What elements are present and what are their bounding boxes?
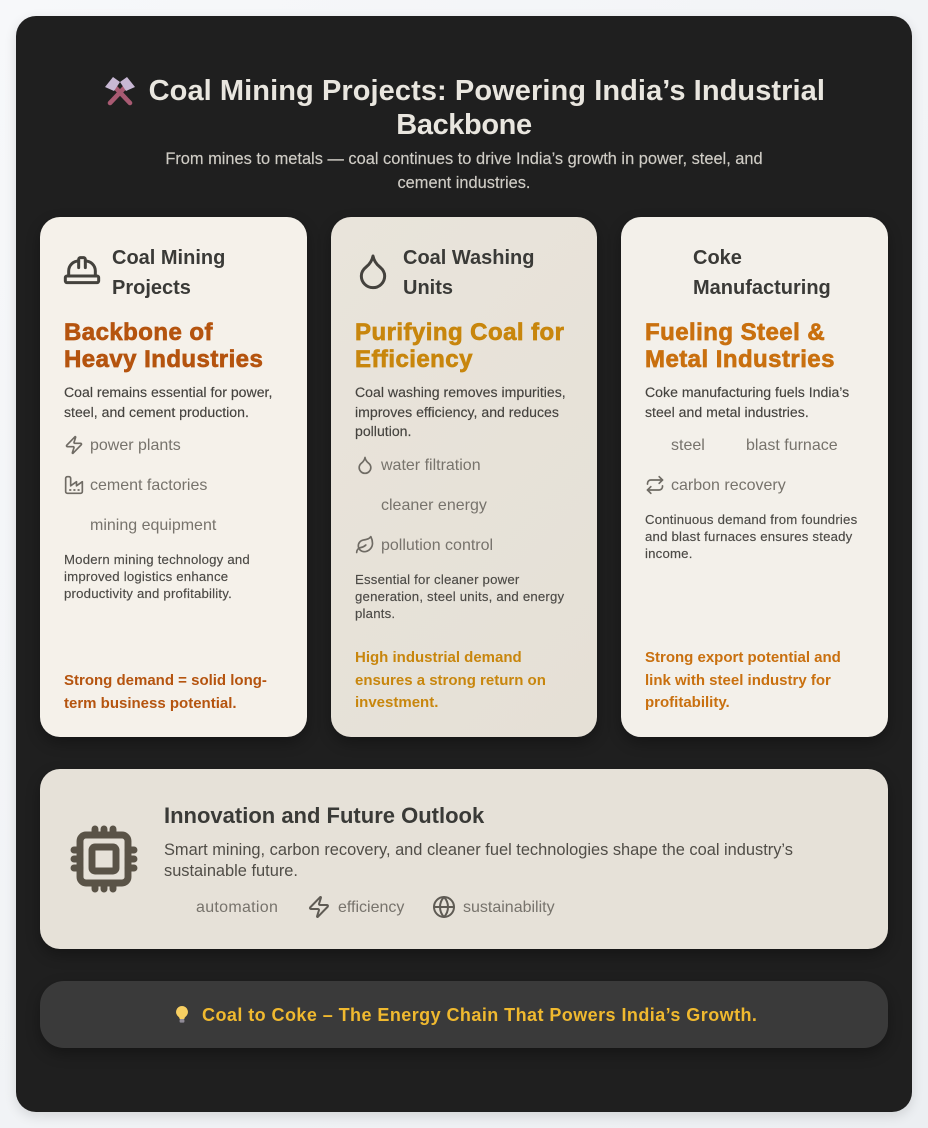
card call to action bbox=[645, 649, 841, 711]
card subheading: Efficiency bbox=[355, 346, 473, 373]
icon: water droplet bbox=[360, 254, 386, 290]
closing message: Coal to Coke – The Energy Chain That Powers India’s Growth. bbox=[202, 1005, 757, 1025]
title: Coal Mining Projects: Powering India’s Industrial bbox=[149, 75, 825, 107]
card call to action: High industrial demand bbox=[355, 649, 522, 666]
tag: carbon recovery: carbon recovery bbox=[671, 477, 786, 494]
tag: steel: steel bbox=[671, 437, 705, 454]
panel: coke manufacturing bbox=[621, 217, 888, 737]
card call to action: Strong demand = solid long- bbox=[64, 672, 267, 689]
card description: pollution. bbox=[355, 423, 411, 439]
card note: income. bbox=[645, 546, 693, 561]
icon: repeat arrows bbox=[646, 476, 664, 494]
card heading: Manufacturing bbox=[693, 277, 831, 299]
tag: power plants: power plants bbox=[90, 437, 181, 454]
title: Backbone bbox=[396, 109, 532, 141]
card call to action: term business potential. bbox=[64, 694, 237, 712]
card subheading bbox=[355, 319, 564, 373]
tag: efficiency bbox=[308, 896, 404, 918]
icon: globe bbox=[433, 896, 455, 918]
card note: Continuous demand from foundries bbox=[645, 512, 857, 527]
card description: steel and metal industries. bbox=[645, 404, 809, 420]
card note bbox=[64, 552, 250, 601]
card heading: Coal Mining bbox=[112, 247, 225, 269]
card note: Modern mining technology and bbox=[64, 552, 250, 567]
icon: crossed hammers emoji bbox=[105, 77, 135, 106]
card heading bbox=[403, 247, 534, 299]
panel: coal mining projects bbox=[40, 217, 307, 737]
tag: cement factories: cement factories bbox=[90, 477, 207, 494]
card call to action: Strong export potential and bbox=[645, 649, 841, 666]
card heading bbox=[693, 247, 831, 299]
card description: improves efficiency, and reduces bbox=[355, 404, 559, 420]
icon: cpu chip bbox=[70, 826, 138, 892]
card description bbox=[355, 384, 566, 440]
card description bbox=[64, 384, 272, 420]
subtitle: cement industries. bbox=[397, 174, 530, 192]
section description: Smart mining, carbon recovery, and cleaner fuel technologies shape the coal industry’s bbox=[164, 841, 793, 859]
tag: sustainability: sustainability bbox=[463, 899, 555, 916]
tag: pollution control: pollution control bbox=[381, 537, 493, 554]
tag: blast furnace: blast furnace bbox=[746, 437, 838, 454]
icon: light bulb emoji bbox=[176, 1006, 188, 1023]
section description bbox=[164, 841, 793, 880]
panel: coal washing units bbox=[331, 217, 597, 737]
card subheading: Heavy Industries bbox=[64, 346, 263, 373]
card call to action: profitability. bbox=[645, 694, 730, 711]
card heading: Coke bbox=[693, 247, 742, 269]
card subheading: Fueling Steel & bbox=[645, 319, 825, 346]
icon: factory bbox=[64, 476, 84, 494]
card subheading: Metal Industries bbox=[645, 346, 835, 373]
card note: improved logistics enhance bbox=[64, 569, 228, 584]
card call to action: link with steel industry for bbox=[645, 672, 831, 688]
card subheading bbox=[64, 319, 263, 373]
subtitle: From mines to metals — coal continues to drive India’s growth in power, steel, and bbox=[165, 150, 763, 168]
tag: automation: automation bbox=[196, 899, 278, 916]
title bbox=[149, 75, 825, 141]
card description: Coke manufacturing fuels India’s bbox=[645, 384, 849, 400]
panel: closing banner bbox=[40, 981, 888, 1048]
card call to action bbox=[355, 649, 546, 711]
icon: lightning bolt bbox=[66, 436, 82, 454]
card call to action: investment. bbox=[355, 694, 438, 711]
icon: leaf bbox=[356, 536, 374, 554]
card description: Coal washing removes impurities, bbox=[355, 384, 566, 400]
card description: steel, and cement production. bbox=[64, 404, 249, 420]
tag: efficiency: efficiency bbox=[338, 899, 404, 916]
section heading: Innovation and Future Outlook bbox=[164, 803, 484, 828]
section description: sustainable future. bbox=[164, 862, 298, 880]
card subheading: Purifying Coal for bbox=[355, 319, 564, 346]
card note: plants. bbox=[355, 606, 395, 621]
card heading: Projects bbox=[112, 277, 191, 299]
card call to action: ensures a strong return on bbox=[355, 672, 546, 688]
card subheading: Backbone of bbox=[64, 319, 213, 346]
panel: innovation and future outlook bbox=[40, 769, 888, 949]
card note: productivity and profitability. bbox=[64, 586, 232, 601]
card description bbox=[645, 384, 849, 420]
card note: Essential for cleaner power bbox=[355, 572, 519, 587]
card heading bbox=[112, 247, 225, 299]
tag: sustainability bbox=[433, 896, 555, 918]
subtitle bbox=[165, 150, 763, 192]
card description: Coal remains essential for power, bbox=[64, 384, 272, 400]
card note: and blast furnaces ensures steady bbox=[645, 529, 852, 544]
card heading: Coal Washing bbox=[403, 247, 534, 269]
card subheading bbox=[645, 319, 835, 373]
icon: lightning bolt bbox=[308, 896, 329, 918]
card note bbox=[645, 512, 857, 561]
tag: water filtration: water filtration bbox=[381, 457, 481, 474]
card call to action bbox=[64, 672, 267, 712]
icon: hard hat bbox=[64, 256, 100, 284]
card note bbox=[355, 572, 564, 621]
card heading: Units bbox=[403, 277, 453, 299]
card note: generation, steel units, and energy bbox=[355, 589, 564, 604]
icon: droplet bbox=[358, 456, 372, 474]
tag: cleaner energy: cleaner energy bbox=[381, 497, 487, 514]
tag: mining equipment: mining equipment bbox=[90, 517, 216, 534]
